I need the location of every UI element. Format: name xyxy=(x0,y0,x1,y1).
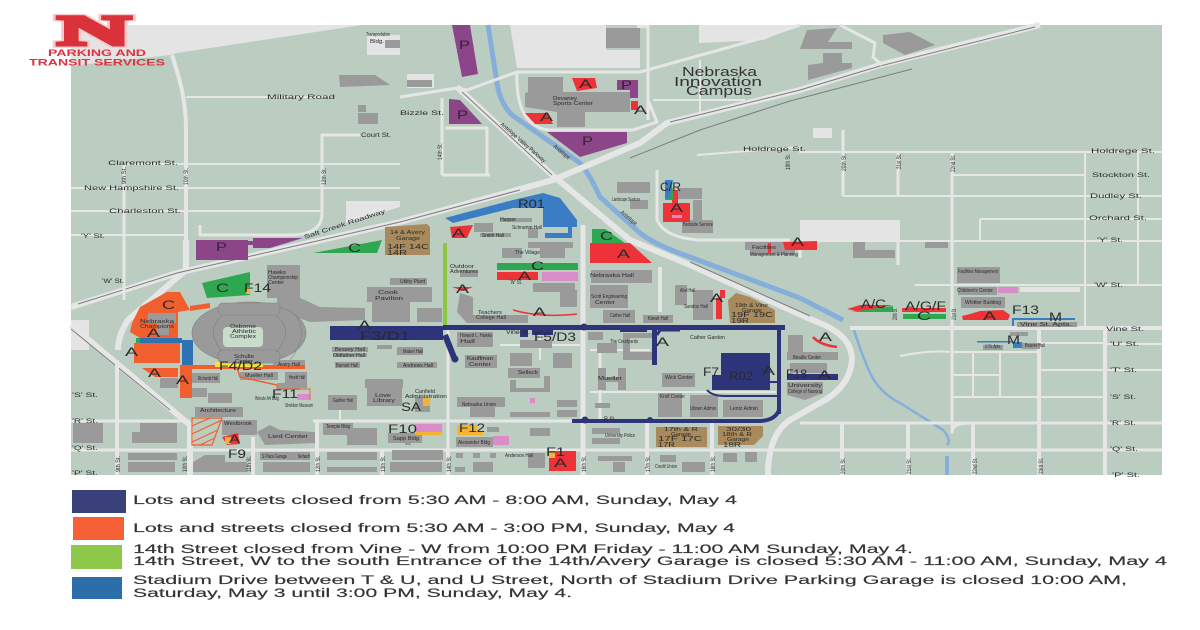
legend item: green closures xyxy=(71,544,1168,569)
building labels: Schramm Hall xyxy=(512,225,542,231)
street labels: Vine St. xyxy=(506,330,530,336)
legend item: navy closures: Lots and streets closed from 5:30 AM - 8:00 AM, Sunday, May 4 xyxy=(133,495,738,507)
building labels: Center xyxy=(595,300,615,306)
street labels: Antelope xyxy=(552,144,571,162)
lot labels: A xyxy=(452,228,466,240)
street labels: 10th St. xyxy=(183,456,189,472)
building labels: Richards Hall xyxy=(198,376,218,382)
building labels: Smith Hall xyxy=(482,233,504,239)
logo wordmark line 2: TRANSIT SERVICES xyxy=(29,58,165,68)
lot labels: F14 xyxy=(244,283,272,295)
creek xyxy=(488,25,949,475)
highways xyxy=(71,25,1040,475)
lot labels: C xyxy=(162,300,175,312)
logo wordmark line 1: PARKING AND xyxy=(48,48,146,59)
building labels: Canfield xyxy=(415,389,435,395)
building labels: Harper xyxy=(500,217,516,223)
street labels: 'Y' St. xyxy=(81,234,106,240)
garage labels: 14R xyxy=(387,248,408,257)
street labels: 'T' St. xyxy=(1110,368,1138,374)
street labels: 'P' St. xyxy=(1112,473,1141,479)
lot labels: P xyxy=(621,80,632,92)
logo xyxy=(29,9,165,68)
buildings xyxy=(73,28,1077,472)
building labels: Bedside Service xyxy=(683,222,713,228)
street labels: Holdrege St. xyxy=(1091,149,1156,155)
lot labels: A xyxy=(791,237,805,249)
building labels: Scott Engineering xyxy=(591,294,627,300)
building labels: Nebraska Union xyxy=(462,402,496,408)
street labels: 18th St. xyxy=(711,456,717,472)
lot labels: C xyxy=(600,231,613,243)
street labels: 'Y' St. xyxy=(1097,238,1124,244)
lots pink xyxy=(195,215,1018,445)
garage labels: 30/30 xyxy=(726,427,751,433)
street labels: 21st St. xyxy=(952,308,958,320)
building labels: Sapp Bldg xyxy=(393,436,419,442)
building labels: U St. Apts. xyxy=(985,344,1001,350)
building labels: Center xyxy=(469,362,491,368)
legend item: blue closures: Stadium Drive between T & U, and U Street, North of Stadium Drive Parking Garage is closed 10:00 AM, xyxy=(133,575,1127,587)
street labels: 19th St. xyxy=(786,154,792,170)
parking lots P purple xyxy=(196,25,638,260)
lot labels: A xyxy=(147,328,161,340)
orange lot inner buildings xyxy=(136,313,176,343)
street labels: Holdrege St. xyxy=(743,147,807,153)
building labels: Howard L. Hawks xyxy=(460,333,492,339)
lot labels: P xyxy=(216,242,227,254)
lot labels: A xyxy=(456,284,470,296)
Osborne Athletic Complex stadium xyxy=(192,302,306,364)
building labels: Lied Center xyxy=(268,434,309,440)
street labels: 20th St. xyxy=(841,458,847,474)
garage labels: Garage xyxy=(727,437,749,443)
lot labels: A xyxy=(540,112,554,124)
lot labels: C xyxy=(917,311,931,323)
building labels: Championship xyxy=(268,275,298,281)
street labels: Military Road xyxy=(267,95,335,101)
street labels: Antelope Valley Parkway xyxy=(499,122,546,165)
building labels: University xyxy=(788,383,823,389)
street labels: 10th St. xyxy=(184,168,190,185)
street labels: 'Q' St. xyxy=(72,446,99,452)
building labels: Nebraska Hall xyxy=(590,273,634,279)
street labels: 16th St. xyxy=(582,456,588,472)
legend item: orange closures xyxy=(73,517,736,540)
building labels: Gaither Hall xyxy=(333,398,353,404)
street labels: 14th St. xyxy=(447,456,453,472)
building labels: University Police xyxy=(605,433,635,439)
street labels: 'W' St. xyxy=(510,280,522,286)
street labels: 11th St. xyxy=(247,456,253,472)
orange closures around stadium xyxy=(130,292,310,400)
building labels: Facilities Management xyxy=(958,269,998,275)
building labels: Utility Plant xyxy=(400,279,426,285)
building labels: Center xyxy=(268,280,284,286)
street labels: 9th St. xyxy=(116,456,122,472)
building labels: Oldfather Hall xyxy=(333,353,365,359)
map background xyxy=(71,25,1162,475)
street labels: Salt Creek Roadway xyxy=(303,209,386,241)
building labels: Cather Hall xyxy=(610,313,630,319)
street labels: 'S' St. xyxy=(72,393,99,399)
building labels: Devaney xyxy=(553,96,578,102)
Devaney Sports Center xyxy=(525,77,630,127)
building labels: Sheldon Museum xyxy=(285,403,313,409)
building labels: Hewitt Hall xyxy=(289,375,305,381)
street labels: 9th St. xyxy=(122,167,128,184)
building labels: Bessey Hall xyxy=(335,347,365,353)
garage labels: 19F 19C xyxy=(731,312,773,319)
lot labels: F11 xyxy=(272,389,298,401)
lot labels: P xyxy=(457,110,468,122)
street labels: New Hampshire St. xyxy=(84,186,180,192)
lot labels: A xyxy=(634,105,648,117)
street labels: 22nd St. xyxy=(951,155,957,172)
lot labels: C xyxy=(216,283,229,295)
building labels: Ubben Admin xyxy=(690,406,716,412)
lot labels: A/C xyxy=(861,299,886,311)
building labels: Facilities xyxy=(752,245,777,251)
building labels: Alexander Bldg xyxy=(458,440,490,446)
street labels: Orchard St. xyxy=(1089,216,1148,222)
lot labels: A xyxy=(617,249,631,261)
garage labels: 17th & R xyxy=(664,427,699,433)
street labels: 20th St. xyxy=(893,308,899,320)
building labels: S Place Garage xyxy=(262,454,287,460)
building labels: College Hall xyxy=(476,315,506,321)
street labels: 21st St. xyxy=(907,458,913,474)
building labels: Library xyxy=(373,398,396,404)
lot labels: R02 xyxy=(729,371,753,383)
building labels: College of Nursing xyxy=(788,389,822,395)
building labels: Hall xyxy=(460,339,475,345)
building labels: Love xyxy=(375,393,391,399)
building labels: Credit Union xyxy=(655,464,677,470)
garage labels: 18R xyxy=(723,442,741,449)
lot R01 xyxy=(445,193,577,227)
street labels: 21st St. xyxy=(897,154,903,169)
lot labels: M xyxy=(1049,312,1062,324)
lot labels: A/G/F xyxy=(905,301,946,313)
garage labels xyxy=(387,230,773,449)
map text labels xyxy=(72,32,1156,479)
building labels: Anderson Hall xyxy=(505,453,533,459)
building labels: Beadle Center xyxy=(793,355,821,361)
lot labels: A xyxy=(125,347,139,359)
lot labels: R01 xyxy=(518,199,545,211)
building labels: Abel Hall xyxy=(680,288,695,294)
street labels: 'Q' St. xyxy=(1110,447,1139,453)
street labels: 'W' St. xyxy=(102,279,124,285)
stadium and west campus xyxy=(73,265,443,472)
lot labels: A xyxy=(762,366,776,378)
garage labels: Garage xyxy=(742,308,762,314)
building labels: Sports Center xyxy=(553,101,593,107)
logo N: N xyxy=(58,9,130,55)
building labels: Architecture xyxy=(200,408,236,414)
building labels: The Courtyards xyxy=(610,339,638,345)
garage labels: 17F 17C xyxy=(658,436,702,443)
building labels: Woods Art Bldg xyxy=(255,396,279,402)
garage labels: 19R xyxy=(731,318,749,325)
street labels: 'S' St. xyxy=(1110,395,1137,401)
garage labels: 18th & R xyxy=(722,432,753,438)
building labels: Nebraska xyxy=(140,319,174,325)
building labels: Westbrook xyxy=(224,421,253,427)
building labels: Andrews Hall xyxy=(403,363,433,369)
lot labels: A xyxy=(710,293,724,305)
street labels: R St. xyxy=(604,417,616,423)
building labels: Avery Hall xyxy=(278,362,300,368)
street labels: Stockton St. xyxy=(1092,173,1151,179)
building labels: Cook xyxy=(378,290,399,296)
lot labels xyxy=(125,40,1062,470)
building labels: Mueller xyxy=(598,376,622,382)
lot labels: C xyxy=(531,261,544,273)
building labels: Management & Planning xyxy=(750,252,798,258)
central and city campus buildings xyxy=(455,270,838,472)
lot labels: A xyxy=(229,434,240,446)
Nebraska Innovation Campus heading: Campus xyxy=(686,84,752,98)
lot labels: F9 xyxy=(228,449,246,461)
building labels: Beaver Hall xyxy=(1025,343,1045,349)
building labels: Outdoor xyxy=(450,264,474,270)
street labels: 'U' St. xyxy=(1110,342,1140,348)
Nebraska Innovation Campus heading: Nebraska xyxy=(682,65,757,79)
legend item: green closures: 14th Street closed from Vine - W from 10:00 PM Friday - 11:00 AM Sunday, May 4. xyxy=(133,544,913,556)
orange hatched lot xyxy=(192,418,222,445)
street labels: Vine St. xyxy=(1106,327,1145,333)
building labels xyxy=(140,32,1072,470)
Innovation Campus buildings xyxy=(339,28,935,124)
lot labels: A xyxy=(533,307,547,319)
logo N outline: N xyxy=(58,9,130,55)
street labels: 17th St. xyxy=(646,456,652,472)
lot labels: P xyxy=(582,136,593,148)
garage labels: 14F 14C xyxy=(387,242,430,251)
building labels: Cather Garden xyxy=(690,335,725,341)
building labels: Athletic xyxy=(232,329,257,335)
lot labels: F13 xyxy=(1012,305,1039,317)
lot labels: A xyxy=(818,370,832,382)
garage labels: 19th & Vine xyxy=(735,303,768,309)
building labels: Temple Bldg xyxy=(326,424,350,430)
lot labels: A xyxy=(176,375,190,387)
legend item: navy closures xyxy=(72,490,738,513)
garage labels: Garage xyxy=(671,432,691,438)
building labels: Transportation xyxy=(366,32,390,38)
lot labels: F4/D2 xyxy=(219,361,262,373)
lot labels: F5/D3 xyxy=(534,332,576,344)
street labels: Dudley St. xyxy=(1090,194,1143,200)
street labels: 22nd St. xyxy=(973,458,979,474)
lot labels: A xyxy=(358,320,372,332)
building labels: Schulte xyxy=(234,354,254,360)
lot labels: F1 xyxy=(546,447,565,459)
lot labels: A xyxy=(554,458,568,470)
building labels: Hawks xyxy=(268,270,287,276)
building labels: Pavilion xyxy=(375,296,403,302)
lot labels: P xyxy=(459,40,470,52)
legend item: blue closures xyxy=(72,575,1127,600)
Stadium Drive blue closure xyxy=(140,338,193,365)
legend xyxy=(71,490,1168,600)
street labels: 14th St. xyxy=(438,143,444,160)
building labels: Whittier Building xyxy=(965,300,1001,306)
building labels: Bldg. xyxy=(370,39,384,45)
street labels: 23rd St. xyxy=(1039,458,1045,474)
lot labels: M xyxy=(1007,335,1020,347)
building labels: Sandoz Hall xyxy=(684,304,708,310)
garages brown xyxy=(385,224,775,447)
street labels xyxy=(72,95,1156,479)
building labels: Mueller Hall xyxy=(245,373,273,379)
street labels: 'R' St. xyxy=(72,419,99,425)
building labels: Children's Center xyxy=(957,288,993,294)
street labels: Court St. xyxy=(361,133,391,139)
building labels: Kauffman xyxy=(467,356,493,362)
14th Street green closure xyxy=(443,243,447,326)
building labels: Landscape Services xyxy=(612,197,640,203)
Nebraska Innovation Campus heading xyxy=(674,65,762,98)
street labels: 'R' St. xyxy=(1110,421,1137,427)
building labels: Kroll Center xyxy=(660,394,685,400)
lot labels: SA xyxy=(401,402,421,414)
lot labels: F7 xyxy=(703,367,719,379)
garage labels: Garage xyxy=(396,236,420,242)
building labels: Administration xyxy=(405,394,447,400)
lot labels: A xyxy=(670,203,684,215)
lot labels: A xyxy=(983,311,997,323)
lot labels: C xyxy=(348,243,361,255)
garage labels: 14 & Avery xyxy=(390,230,426,236)
building labels: Osborne xyxy=(230,324,256,330)
Nebraska Innovation Campus heading: Innovation xyxy=(674,75,762,89)
building labels: Teachers xyxy=(478,310,503,316)
blue lots xyxy=(445,180,1075,348)
legend item: orange closures: Lots and streets closed from 5:30 AM - 3:00 PM, Sunday, May 4 xyxy=(133,523,736,535)
legend item: blue closures: Saturday, May 3 until 3:00 PM, Sunday, May 4. xyxy=(133,588,572,600)
street labels: Bizzle St. xyxy=(400,111,445,117)
legend item: green closures: 14th Street, W to the south Entrance of the 14th/Avery Garage is closed 5:30 AM - 11:00 AM, Sunday, May 4 xyxy=(133,556,1168,568)
street labels: 12th St. xyxy=(316,456,322,472)
building labels: Champions xyxy=(140,324,175,330)
street labels: 12th St. xyxy=(322,168,328,185)
lot labels: F12 xyxy=(459,423,485,435)
street labels: 'W' St. xyxy=(1094,283,1124,289)
lot labels: A xyxy=(819,332,833,344)
navy closures xyxy=(330,324,838,424)
F4/D2 yellow lot xyxy=(215,362,263,367)
street labels: 'P' St. xyxy=(72,471,99,477)
building labels: Burnett Hall xyxy=(336,363,358,369)
lot labels: A xyxy=(518,271,532,283)
street labels: 20th St. xyxy=(842,154,848,171)
lot labels: C/R xyxy=(660,182,681,194)
lot labels: A xyxy=(579,79,593,91)
building labels: Wick Center xyxy=(665,375,693,381)
building labels: Center xyxy=(235,359,253,365)
undeveloped light areas xyxy=(71,25,1080,350)
road network xyxy=(71,25,1162,475)
building labels: Neihardt xyxy=(298,454,310,460)
building labels: Kiewit Hall xyxy=(648,316,668,322)
street labels: Charleston St. xyxy=(109,209,182,215)
lot labels: F18 xyxy=(786,369,807,381)
building labels: Adventures xyxy=(450,269,479,275)
lots yellow xyxy=(225,287,555,458)
parking lots A red xyxy=(222,78,1010,471)
building labels: Lentz Admin xyxy=(730,406,758,412)
street labels: Claremont St. xyxy=(108,161,179,167)
building labels: Vine St. Apts. xyxy=(1020,322,1072,328)
lot labels: A xyxy=(148,368,162,380)
east campus north buildings xyxy=(460,182,1077,350)
parking lots C green xyxy=(202,180,946,319)
lot labels: A xyxy=(656,337,670,349)
street labels: Antelope xyxy=(619,210,638,228)
building labels: The Village xyxy=(515,250,540,256)
building labels: Selleck xyxy=(518,370,539,376)
street labels: 13th St. xyxy=(381,456,387,472)
building labels: Mabel Hall xyxy=(403,349,423,355)
garage labels: 17R xyxy=(658,442,675,449)
building labels: Complex xyxy=(230,334,257,340)
lot labels: F3/D1 xyxy=(360,331,410,343)
lot labels: F10 xyxy=(388,424,417,436)
